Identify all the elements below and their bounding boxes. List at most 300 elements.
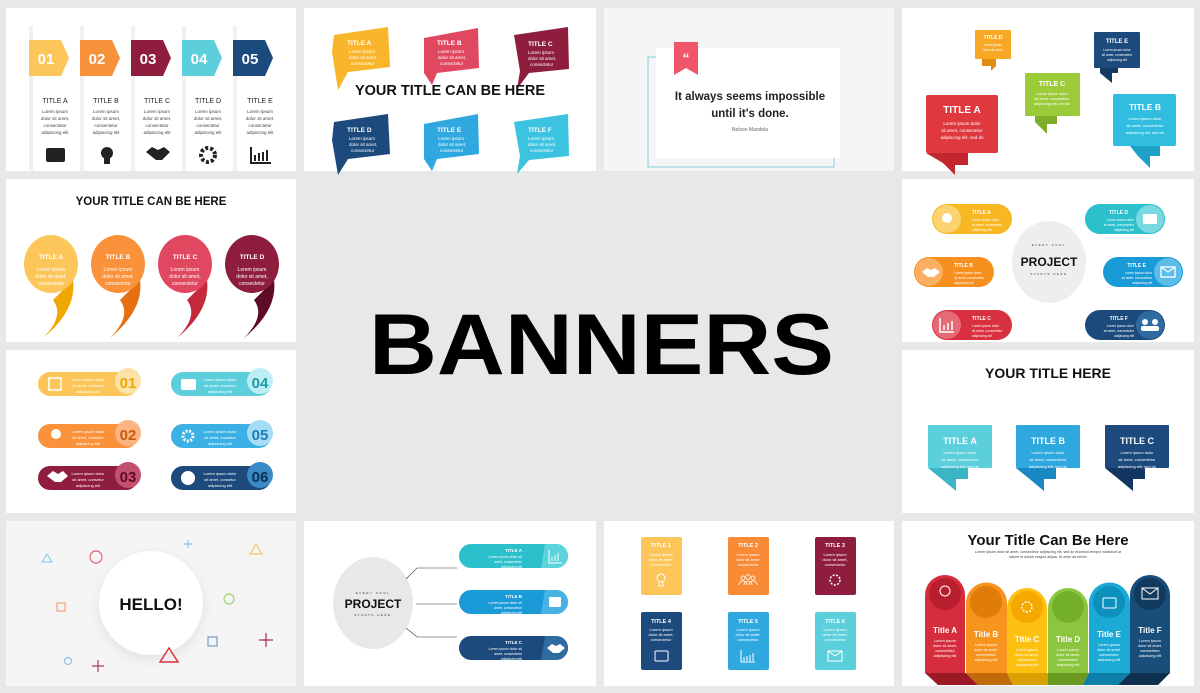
- column A: Title A: [933, 626, 957, 635]
- banner A: Lorem ipsum dolor: [943, 450, 977, 455]
- step 04: [182, 40, 222, 162]
- drop A: Lorem ipsum: [37, 267, 65, 273]
- branch C: [459, 636, 568, 661]
- pill 04: 04: [252, 375, 269, 392]
- branch C: Lorem ipsum dolor sit: [489, 647, 522, 651]
- drop D: dolor sit amet,: [236, 274, 268, 280]
- banner A: [928, 425, 992, 491]
- column A: adipiscing elit: [934, 654, 957, 658]
- column F: dolor sit amet,: [1138, 644, 1162, 648]
- pill 04: Lorem ipsum dolor: [203, 377, 237, 382]
- drop D: consectetur: [239, 281, 265, 287]
- pill E: sit amet, consectetur: [1122, 276, 1153, 280]
- card 3: consectetur: [825, 562, 846, 567]
- card 5: dolor sit amet,: [735, 632, 761, 637]
- pill 05: Lorem ipsum dolor: [203, 429, 237, 434]
- quote text: [675, 91, 825, 133]
- pill 03: Lorem ipsum dolor: [71, 471, 105, 476]
- column A: dolor sit amet,: [933, 644, 957, 648]
- banner B: TITLE B: [1031, 436, 1065, 446]
- card 4: dolor sit amet,: [648, 632, 674, 637]
- pill 04: adipiscing elit: [208, 389, 233, 394]
- ribbon C: Lorem ipsum: [528, 50, 554, 55]
- ribbon B: [424, 28, 479, 85]
- drop C: consectetur: [172, 281, 198, 287]
- panel: numbered pills: [6, 350, 296, 513]
- step 02: TITLE B: [93, 98, 119, 105]
- heading: YOUR TITLE CAN BE HERE: [76, 196, 227, 208]
- callout E: adipiscing elit: [1107, 58, 1127, 62]
- hub ellipse: STARTS HERE: [354, 613, 392, 617]
- step 02: Lorem ipsum: [93, 109, 119, 114]
- pill 01: adipiscing elit: [76, 389, 101, 394]
- banner C: Lorem ipsum dolor: [1120, 450, 1154, 455]
- step 05: 05: [242, 51, 258, 68]
- card 6: consectetur: [825, 637, 846, 642]
- step 03: [131, 40, 171, 160]
- pill D: sit amet, consectetur: [1104, 223, 1135, 227]
- branch A: adipiscing elit: [501, 565, 522, 569]
- card 5: [728, 612, 769, 670]
- panel: speech callouts: [902, 8, 1194, 175]
- panel: tab cards: [604, 521, 894, 686]
- banner B: adipiscing elit, sed do: [1029, 464, 1068, 469]
- column C: [1007, 588, 1047, 673]
- column F: consectetur: [1140, 649, 1161, 653]
- pill D: TITLE D: [1109, 210, 1128, 216]
- callout A: adipiscing elit, sed do: [940, 135, 984, 140]
- step 03: consectetur: [145, 123, 169, 128]
- pill 03: [38, 462, 141, 490]
- hello circle: HELLO!: [119, 595, 183, 614]
- drop B: TITLE B: [106, 254, 131, 261]
- card 3: [815, 537, 856, 595]
- panel: three flag banners: [902, 350, 1194, 513]
- hub circle: [1012, 221, 1086, 303]
- callout C: TITLE C: [1039, 81, 1065, 88]
- quote text: until it's done.: [711, 108, 789, 120]
- step 01: consectetur: [43, 123, 67, 128]
- callout B: [1113, 94, 1176, 168]
- card 2: TITLE 2: [738, 543, 758, 549]
- pill E: adipiscing elit: [1132, 281, 1152, 285]
- heading: labore et dolore magna aliqua. Ut enim ad minim: [1009, 555, 1087, 559]
- title: YOUR TITLE CAN BE HERE: [355, 83, 545, 99]
- branch B: adipiscing elit: [501, 611, 522, 615]
- step 05: consectetur: [248, 123, 272, 128]
- column B: [966, 582, 1007, 673]
- card 1: Lorem ipsum: [649, 552, 673, 557]
- pill D: [1085, 204, 1165, 234]
- callout C: Lorem ipsum dolor: [1036, 92, 1068, 96]
- column F: Lorem ipsum: [1139, 639, 1161, 643]
- ribbon A: Lorem ipsum: [349, 49, 375, 54]
- step 03: dolor sit amet,: [143, 116, 171, 121]
- pill B: adipiscing elit: [954, 281, 974, 285]
- ribbon F: dolor sit amet,: [528, 142, 556, 147]
- pill D: Lorem ipsum dolor: [1107, 218, 1135, 222]
- pill 02: adipiscing elit: [76, 441, 101, 446]
- card 5: Lorem ipsum: [736, 627, 760, 632]
- pill 06: Lorem ipsum dolor: [203, 471, 237, 476]
- callout B: adipiscing elit, sed do: [1126, 130, 1165, 135]
- base: [925, 673, 1170, 685]
- pill A: TITLE A: [972, 210, 991, 216]
- callout E: Lorem ipsum dolor: [1103, 48, 1132, 52]
- drop A: dolor sit amet,: [35, 274, 67, 280]
- branch A: amet, consectetur: [494, 560, 523, 564]
- pill A: Lorem ipsum dolor: [972, 218, 1000, 222]
- icon: red triangle: [160, 648, 178, 662]
- pill D: adipiscing elit: [1114, 228, 1134, 232]
- step 02: 02: [89, 51, 105, 68]
- ribbon F: Lorem ipsum: [528, 136, 554, 141]
- drop D: Lorem ipsum: [238, 267, 266, 273]
- callout B: sit amet, consectetur: [1127, 123, 1164, 128]
- column D: Lorem ipsum: [1057, 648, 1079, 652]
- ribbon E: Lorem ipsum: [438, 136, 464, 141]
- card 4: [641, 612, 682, 670]
- pill 05: [171, 420, 273, 448]
- pill C: [932, 310, 1012, 340]
- branch C: amet, consectetur: [494, 652, 523, 656]
- callout C: sit amet, consectetur: [1034, 97, 1070, 101]
- pill 02: [38, 420, 141, 448]
- icon: quote bookmark: [674, 42, 698, 75]
- step 01: dolor sit amet,: [41, 116, 69, 121]
- pill 01: sit amet, consetur: [72, 383, 104, 388]
- column C: Title C: [1015, 635, 1039, 644]
- step 01: 01: [38, 51, 54, 68]
- column B: consectetur: [976, 653, 997, 657]
- ribbon E: dolor sit amet,: [438, 142, 466, 147]
- quote text: Nelson Mandela: [732, 127, 768, 133]
- callout E: sit amet, consectetur: [1102, 53, 1133, 57]
- pill F: sit amet, consectetur: [1104, 329, 1135, 333]
- panel: project hub: [902, 179, 1194, 342]
- panel: numbered steps: [6, 8, 296, 171]
- pill B: Lorem ipsum dolor: [954, 271, 982, 275]
- step 01: [29, 40, 69, 162]
- ribbon A: consectetur: [351, 61, 375, 66]
- panel: BANNERS center: [304, 179, 894, 513]
- column D: adipiscing elit: [1057, 663, 1080, 667]
- pill 02: sit amet, consetur: [72, 435, 104, 440]
- pill 05: sit amet, consetur: [204, 435, 236, 440]
- card 2: consectetur: [738, 562, 759, 567]
- pill 05: adipiscing elit: [208, 441, 233, 446]
- card 5: consectetur: [738, 637, 759, 642]
- banner B: sit amet, consectetur: [1030, 457, 1067, 462]
- ribbon F: TITLE F: [528, 127, 552, 134]
- step 02: consectetur: [94, 123, 118, 128]
- step 05: [233, 40, 274, 163]
- pill 06: 06: [252, 469, 268, 486]
- banner A: adipiscing elit, sed do: [941, 464, 980, 469]
- column F: [1130, 575, 1170, 673]
- step 05: Lorem ipsum: [247, 109, 273, 114]
- callout E: TITLE E: [1106, 39, 1128, 45]
- callout C: [1025, 73, 1080, 134]
- callout D: TITLE D: [984, 35, 1003, 41]
- column F: adipiscing elit: [1139, 654, 1162, 658]
- hub circle: STARTS HERE: [1030, 272, 1068, 276]
- pill 06: adipiscing elit: [208, 483, 233, 488]
- pill C: Lorem ipsum dolor: [972, 324, 1000, 328]
- column E: dolor sit amet,: [1097, 648, 1121, 652]
- column F: Title F: [1138, 626, 1162, 635]
- pill 03: 03: [120, 469, 136, 486]
- banner C: adipiscing elit, sed do: [1118, 464, 1157, 469]
- pill A: sit amet, consectetur: [972, 223, 1003, 227]
- panel: hello: [6, 521, 296, 686]
- column C: dolor sit amet,: [1015, 653, 1039, 657]
- drop D: [225, 235, 279, 338]
- icon: quote bookmark: “: [682, 50, 690, 66]
- step 02: adipiscing elit: [92, 130, 120, 135]
- banner C: TITLE C: [1120, 436, 1154, 446]
- branch A: TITLE A: [505, 548, 523, 553]
- card 1: TITLE 1: [651, 543, 671, 549]
- ribbon E: [424, 114, 479, 171]
- card 1: [641, 537, 682, 595]
- hub ellipse: [333, 557, 413, 649]
- panel: comma drops: [6, 179, 296, 342]
- callout A: TITLE A: [943, 105, 981, 116]
- heading: Your Title Can Be Here: [967, 532, 1129, 549]
- card 4: consectetur: [651, 637, 672, 642]
- pill F: TITLE F: [1110, 316, 1128, 322]
- pill C: sit amet, consectetur: [972, 329, 1003, 333]
- column E: [1089, 582, 1130, 673]
- callout C: adipiscing elit, sed do: [1034, 102, 1070, 106]
- panel: quote: [604, 8, 894, 171]
- column C: consectetur: [1017, 658, 1038, 662]
- column E: Title E: [1097, 630, 1122, 639]
- column D: [1048, 588, 1088, 673]
- pill E: [1103, 257, 1183, 287]
- hub ellipse: EVERY COOL: [356, 591, 390, 595]
- callout D: Lorem ipsum: [984, 43, 1003, 47]
- card 1: consectetur: [651, 562, 672, 567]
- pill 02: Lorem ipsum dolor: [71, 429, 105, 434]
- card 3: dolor sit amet,: [822, 557, 848, 562]
- ribbon D: consectetur: [351, 148, 375, 153]
- pill B: [914, 257, 994, 287]
- pill 01: 01: [120, 375, 136, 392]
- card 2: [728, 537, 769, 595]
- hub circle: PROJECT: [1021, 255, 1078, 269]
- pill 04: [171, 368, 273, 396]
- pill E: TITLE E: [1127, 263, 1147, 269]
- column E: consectetur: [1099, 653, 1120, 657]
- column D: Title D: [1056, 635, 1080, 644]
- ribbon D: Lorem ipsum: [349, 136, 375, 141]
- callout D: [975, 30, 1011, 71]
- drop C: dolor sit amet,: [169, 274, 201, 280]
- step 03: 03: [140, 51, 156, 68]
- banner A: TITLE A: [943, 436, 977, 446]
- drop A: [24, 235, 78, 338]
- panel: project branches: [304, 521, 596, 686]
- branch B: TITLE B: [505, 594, 523, 599]
- card 6: TITLE 6: [825, 619, 845, 625]
- ribbon A: dolor sit amet,: [349, 55, 377, 60]
- pill C: adipiscing elit: [972, 334, 992, 338]
- drop C: [158, 235, 212, 338]
- pill 04: sit amet, consetur: [204, 383, 236, 388]
- pill F: Lorem ipsum dolor: [1107, 324, 1135, 328]
- column B: dolor sit amet,: [974, 648, 998, 652]
- pill F: adipiscing elit: [1114, 334, 1134, 338]
- step 04: TITLE D: [195, 98, 221, 105]
- pill C: TITLE C: [972, 316, 991, 322]
- pill B: sit amet, consectetur: [954, 276, 985, 280]
- pill 06: [171, 462, 273, 490]
- heading: BANNERS: BANNERS: [369, 297, 834, 393]
- heading: YOUR TITLE HERE: [985, 365, 1111, 381]
- pill 02: 02: [120, 427, 136, 444]
- step 04: dolor sit amet,: [194, 116, 222, 121]
- column B: adipiscing elit: [975, 658, 998, 662]
- hub ellipse: PROJECT: [345, 597, 402, 611]
- ribbon A: TITLE A: [347, 40, 372, 47]
- drop B: [91, 235, 145, 338]
- ribbon E: consectetur: [440, 148, 464, 153]
- branch B: [459, 590, 568, 615]
- panel: six arch columns: [902, 521, 1194, 686]
- column E: adipiscing elit: [1098, 658, 1121, 662]
- pill 06: sit amet, consetur: [204, 477, 236, 482]
- ribbon B: consectetur: [440, 61, 464, 66]
- column A: consectetur: [935, 649, 956, 653]
- hello circle: [99, 551, 203, 655]
- step 05: TITLE E: [247, 98, 273, 105]
- step 04: consectetur: [196, 123, 220, 128]
- drop B: dolor sit amet,: [102, 274, 134, 280]
- step 05: dolor sit amet,: [246, 116, 274, 121]
- step 03: adipiscing elit: [143, 130, 171, 135]
- step 02: [80, 40, 120, 164]
- callout A: [926, 95, 998, 175]
- banner B: Lorem ipsum dolor: [1031, 450, 1065, 455]
- drop A: TITLE A: [39, 254, 63, 261]
- step 04: 04: [191, 51, 208, 68]
- drop B: consectetur: [105, 281, 131, 287]
- step 01: Lorem ipsum: [42, 109, 68, 114]
- branch C: adipiscing elit: [501, 657, 522, 661]
- step 05: adipiscing elit: [246, 130, 274, 135]
- ribbon D: TITLE D: [347, 127, 372, 134]
- ribbon F: [514, 114, 569, 174]
- card 6: [815, 612, 856, 670]
- ribbon B: dolor sit amet,: [438, 55, 466, 60]
- card 3: Lorem ipsum: [823, 552, 847, 557]
- card 2: Lorem ipsum: [736, 552, 760, 557]
- card 6: dolor sit amet,: [822, 632, 848, 637]
- drop C: Lorem ipsum: [171, 267, 199, 273]
- callout B: Lorem ipsum dolor: [1128, 116, 1162, 121]
- ribbon C: TITLE C: [528, 41, 553, 48]
- card 5: TITLE 5: [738, 619, 758, 625]
- step 03: Lorem ipsum: [144, 109, 170, 114]
- card 6: Lorem ipsum: [823, 627, 847, 632]
- column B: Lorem ipsum: [975, 643, 997, 647]
- pill E: Lorem ipsum dolor: [1125, 271, 1153, 275]
- ribbon F: consectetur: [530, 148, 554, 153]
- drop B: Lorem ipsum: [104, 267, 132, 273]
- step 04: Lorem ipsum: [195, 109, 221, 114]
- quote text: It always seems impossible: [675, 91, 825, 103]
- step 01: adipiscing elit: [41, 130, 69, 135]
- ribbon C: dolor sit amet,: [528, 56, 556, 61]
- column C: Lorem ipsum: [1016, 648, 1038, 652]
- drop D: TITLE D: [240, 254, 265, 261]
- pill 05: 05: [252, 427, 268, 444]
- hub circle: EVERY COOL: [1032, 243, 1066, 247]
- branch C: TITLE C: [505, 640, 523, 645]
- branch B: amet, consectetur: [494, 606, 523, 610]
- ribbon A: [332, 27, 390, 90]
- ribbon C: consectetur: [530, 62, 554, 67]
- branch B: Lorem ipsum dolor sit: [489, 601, 522, 605]
- card 3: TITLE 3: [825, 543, 845, 549]
- callout E: [1094, 32, 1140, 83]
- banner C: [1105, 425, 1169, 491]
- ribbon B: Lorem ipsum: [438, 49, 464, 54]
- column D: dolor sit amet,: [1056, 653, 1080, 657]
- callout A: sit amet, consectetur: [941, 128, 983, 133]
- column B: Title B: [974, 630, 998, 639]
- pill 01: Lorem ipsum dolor: [71, 377, 105, 382]
- callout A: Lorem ipsum dolor: [943, 121, 981, 126]
- banner C: sit amet, consectetur: [1119, 457, 1156, 462]
- branch A: [459, 544, 568, 569]
- ribbon B: TITLE B: [437, 40, 462, 47]
- pill A: [932, 204, 1012, 234]
- callout B: TITLE B: [1129, 102, 1161, 112]
- column A: [925, 575, 965, 673]
- column D: consectetur: [1058, 658, 1079, 662]
- pill B: TITLE B: [954, 263, 973, 269]
- callout D: dolor sit amet,: [983, 48, 1003, 52]
- pill 01: [38, 368, 141, 396]
- ribbon D: [332, 114, 390, 175]
- column C: adipiscing elit: [1016, 663, 1039, 667]
- step 03: TITLE C: [144, 98, 170, 105]
- banner A: sit amet, consectetur: [942, 457, 979, 462]
- pill A: adipiscing elit: [972, 228, 992, 232]
- ribbon C: [514, 27, 569, 89]
- drop C: TITLE C: [173, 254, 198, 261]
- connector arrows: [406, 568, 457, 637]
- pill 03: sit amet, consetur: [72, 477, 104, 482]
- drop A: consectetur: [38, 281, 64, 287]
- step 01: TITLE A: [42, 98, 68, 105]
- branch A: Lorem ipsum dolor sit: [489, 555, 522, 559]
- heading: Lorem ipsum dolor sit amet, consectetur adipiscing elit, sed do eiusmod tempor incididunt ut: [975, 550, 1121, 554]
- pill 03: adipiscing elit: [76, 483, 101, 488]
- card 4: TITLE 4: [651, 619, 672, 625]
- pill F: [1085, 310, 1165, 340]
- card 1: dolor sit amet,: [648, 557, 674, 562]
- column A: Lorem ipsum: [934, 639, 956, 643]
- heading: [967, 532, 1129, 559]
- step 04: adipiscing elit: [194, 130, 222, 135]
- ribbon E: TITLE E: [437, 127, 462, 134]
- banner B: [1016, 425, 1080, 491]
- panel: folded ribbons: [304, 8, 596, 175]
